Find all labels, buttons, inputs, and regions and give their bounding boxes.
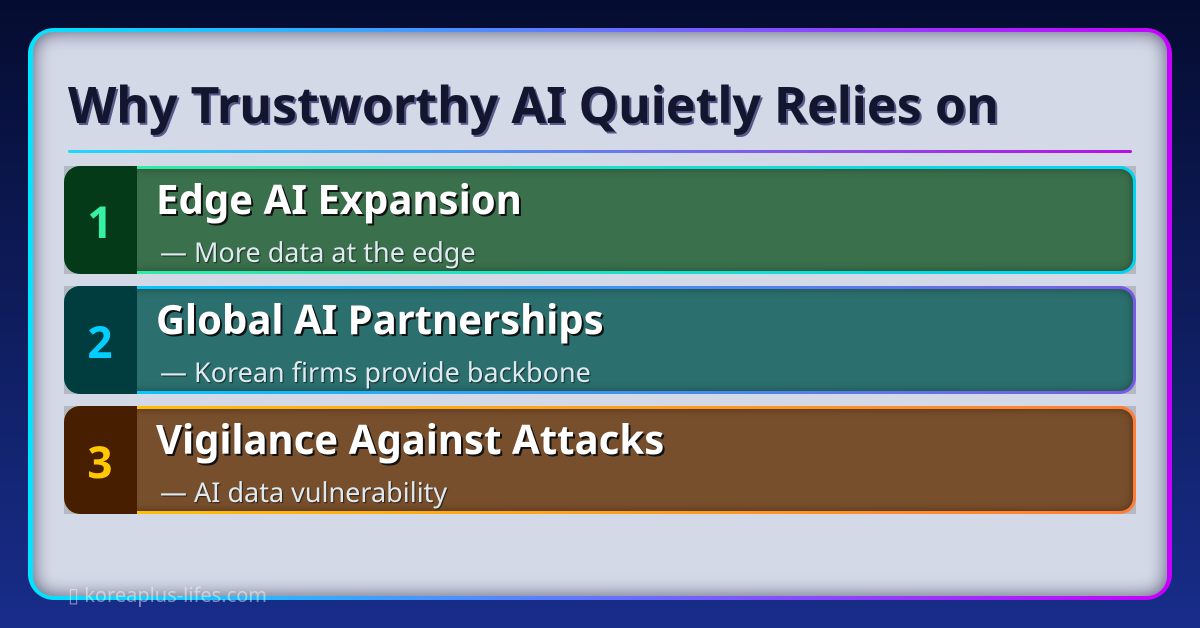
- row 1: Edge AI Expansion: — More data at the edge: [160, 233, 476, 270]
- row 1: Edge AI Expansion: [64, 166, 1136, 274]
- footer source: ▯ koreaplus-lifes.com: [68, 581, 267, 608]
- row 3: Vigilance Against Attacks: [64, 406, 1136, 514]
- row 3: Vigilance Against Attacks: 3: [87, 431, 113, 491]
- row 1: Edge AI Expansion: 1: [87, 191, 113, 251]
- row 3: Vigilance Against Attacks: Vigilance Against Attacks: [156, 411, 664, 466]
- title: Why Trustworthy AI Quietly Relies on: [68, 70, 999, 138]
- row 2: Global AI Partnerships: 2: [87, 311, 113, 371]
- row 2: Global AI Partnerships: — Korean firms provide backbone: [160, 353, 591, 390]
- row 3: Vigilance Against Attacks: — AI data vulnerability: [160, 473, 447, 510]
- row 2: Global AI Partnerships: [64, 286, 1136, 394]
- row 1: Edge AI Expansion: Edge AI Expansion: [156, 171, 522, 226]
- row 2: Global AI Partnerships: Global AI Partnerships: [156, 291, 604, 346]
- gradient rule under title: [68, 150, 1132, 153]
